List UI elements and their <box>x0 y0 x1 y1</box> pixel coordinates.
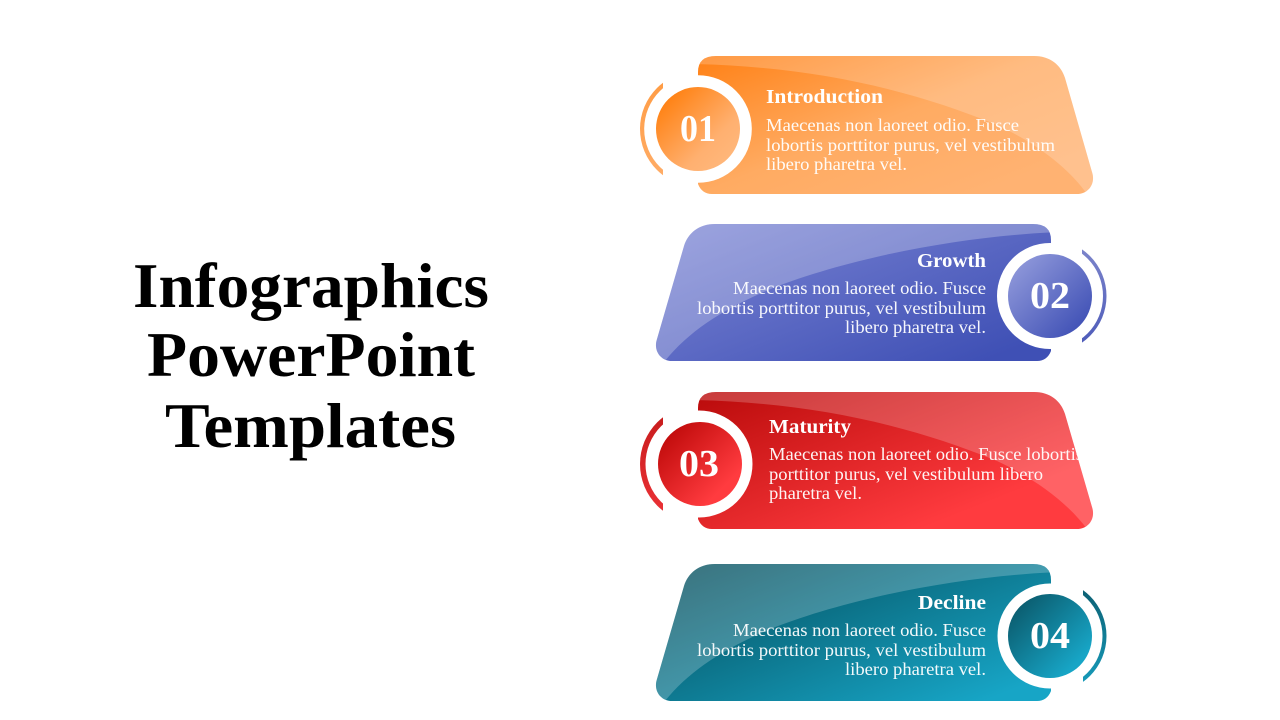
card shape: decline <box>656 564 1051 701</box>
body text: introduction: lobortis porttitor purus, vel vestibulum <box>766 135 1055 155</box>
panel: decline <box>650 555 1106 701</box>
body text: decline <box>697 620 986 679</box>
body text: maturity: pharetra vel. <box>769 483 862 503</box>
body text: maturity <box>769 444 1083 503</box>
heading: Decline: Decline <box>918 592 986 614</box>
body text: growth <box>697 278 986 337</box>
number badge: 02 <box>1008 254 1092 338</box>
white ring: 01 <box>644 75 752 183</box>
arc accent: 03 <box>640 417 663 511</box>
body text: introduction: Maecenas non laoreet odio. Fusce <box>766 115 1019 135</box>
body text: maturity: porttitor purus, vel vestibulum libero <box>769 464 1043 484</box>
body text: decline: lobortis porttitor purus, vel vestibulum <box>697 640 986 660</box>
title <box>133 250 489 461</box>
body text: growth: Maecenas non laoreet odio. Fusce <box>733 278 986 298</box>
gloss highlight: introduction <box>690 50 1100 194</box>
card shape: introduction <box>698 56 1093 194</box>
gloss highlight: growth <box>656 224 1050 360</box>
panel: growth <box>650 215 1106 361</box>
title: Templates <box>165 390 456 461</box>
arc accent: 04 <box>1083 590 1106 682</box>
body text: maturity: Maecenas non laoreet odio. Fusce lobortis <box>769 444 1083 464</box>
white ring: 03 <box>646 410 752 518</box>
number: 03: 03 <box>679 443 719 485</box>
number badge: 04 <box>1008 594 1092 678</box>
white ring: 04 <box>998 584 1102 688</box>
body text: decline: Maecenas non laoreet odio. Fusce <box>733 620 986 640</box>
number badge: 01 <box>656 87 740 171</box>
title: Infographics <box>133 250 489 321</box>
number: 02: 02 <box>1030 275 1070 317</box>
heading: Introduction: Introduction <box>766 86 883 108</box>
body text: growth: libero pharetra vel. <box>845 317 986 337</box>
number: 04: 04 <box>1030 615 1070 657</box>
heading: Maturity: Maturity <box>769 416 851 438</box>
number badge: 03 <box>658 422 742 506</box>
arc accent: 02 <box>1082 250 1106 342</box>
arc accent: 01 <box>640 82 663 176</box>
panel: maturity <box>640 386 1100 529</box>
white ring: 02 <box>997 243 1103 349</box>
body text: introduction <box>766 115 1055 174</box>
card shape: growth <box>656 224 1051 361</box>
card shape: maturity <box>698 392 1093 529</box>
number: 01: 01 <box>680 108 716 150</box>
panel: introduction <box>640 50 1100 194</box>
gloss highlight: decline <box>656 564 1050 700</box>
body text: decline: libero pharetra vel. <box>845 659 986 679</box>
gloss highlight: maturity <box>690 386 1100 529</box>
body text: introduction: libero pharetra vel. <box>766 154 907 174</box>
title: PowerPoint <box>147 319 476 390</box>
body text: growth: lobortis porttitor purus, vel vestibulum <box>697 298 986 318</box>
heading: Growth: Growth <box>917 250 986 272</box>
